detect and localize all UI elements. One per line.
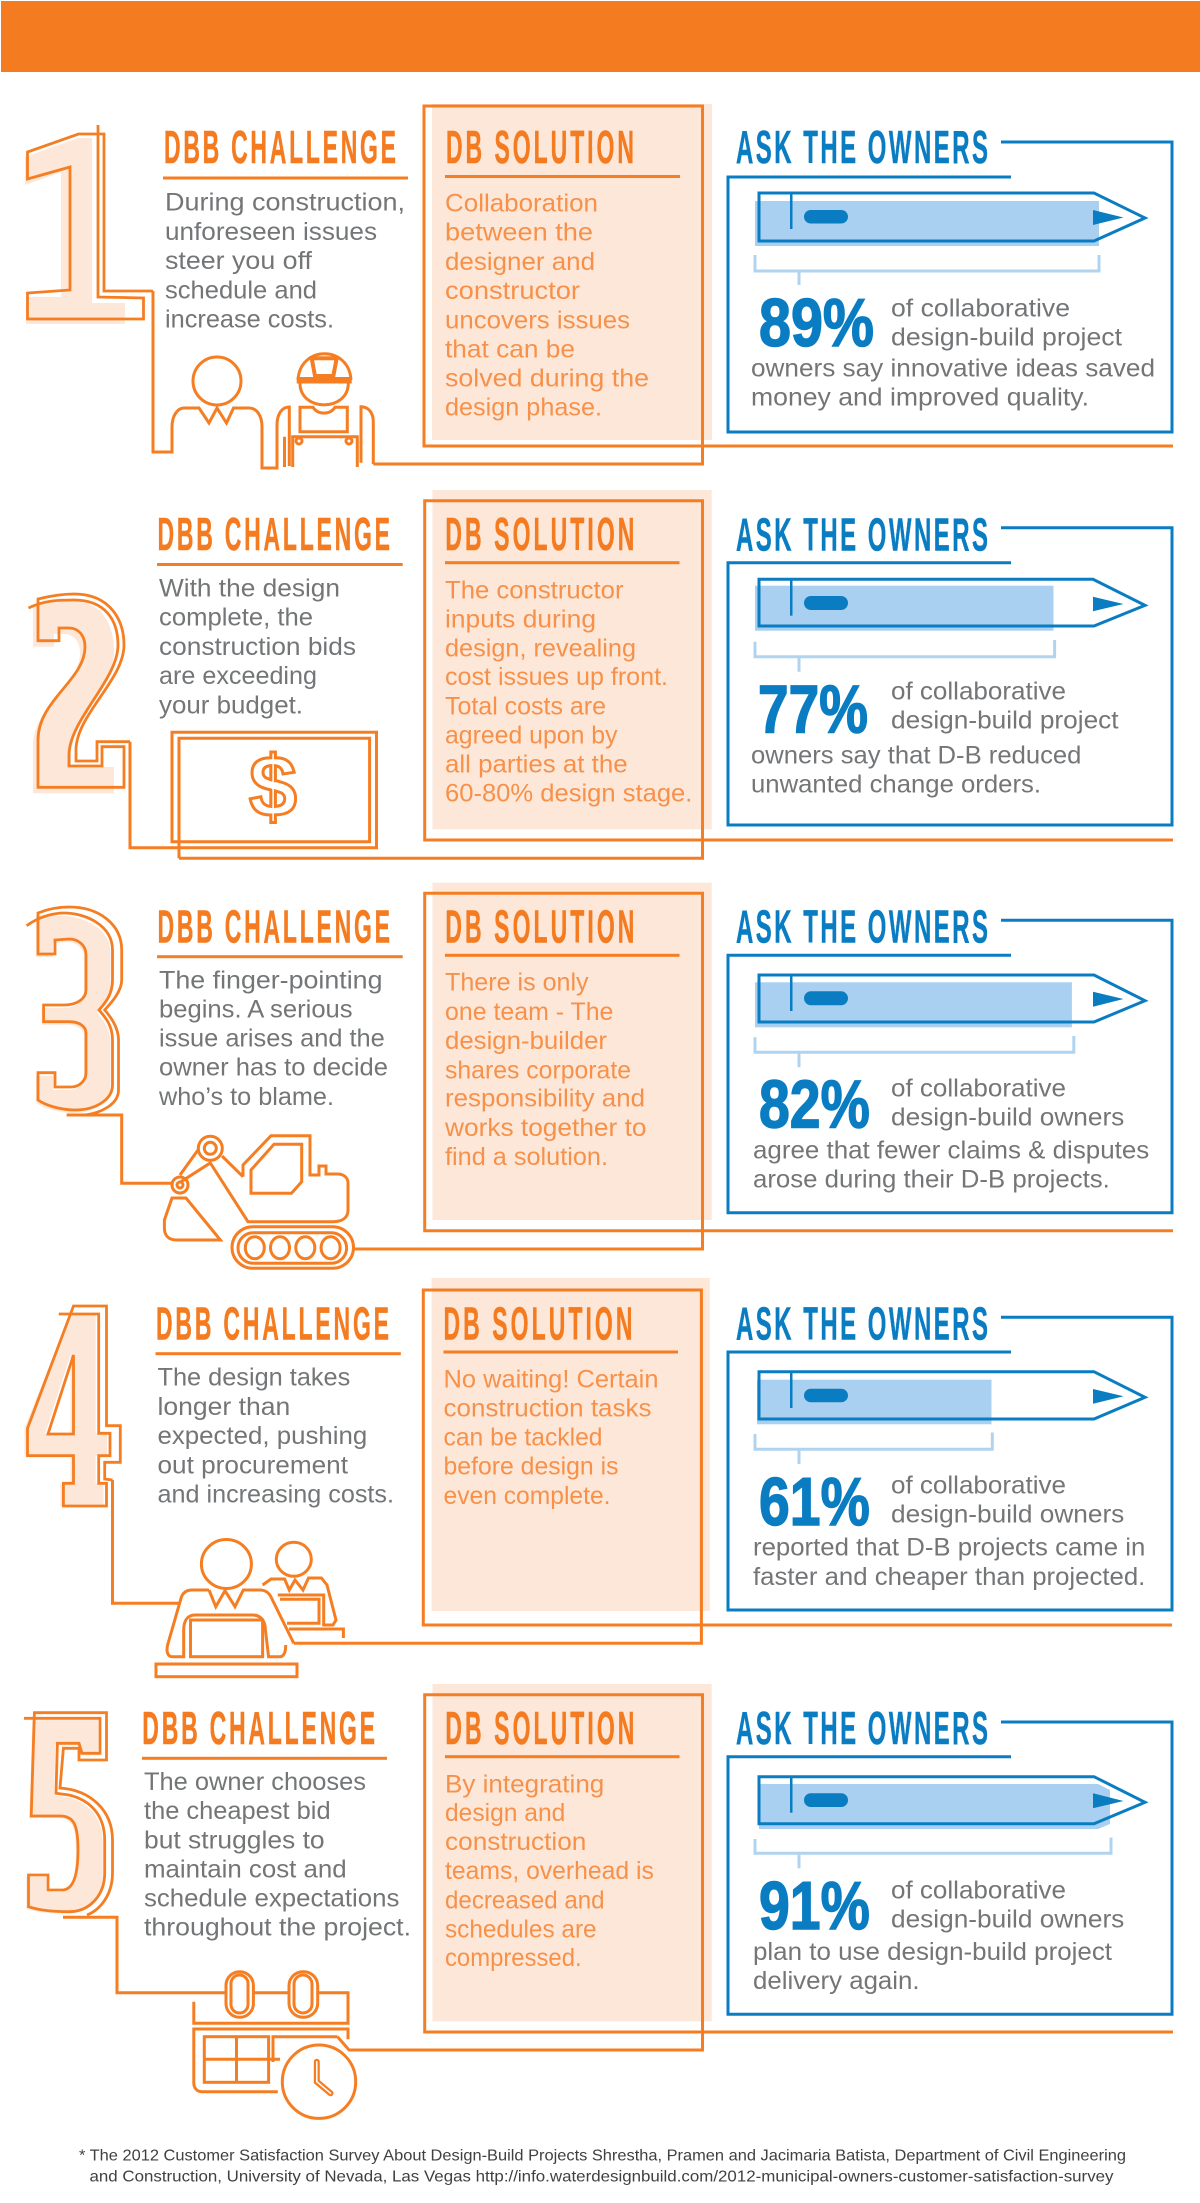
pencil gauge 89% [755, 193, 1145, 285]
DB solution text: agreed upon by [445, 721, 618, 749]
panel: row 2 [28, 490, 1173, 858]
number 4 [24, 1306, 120, 1506]
DB solution text: that can be [445, 335, 575, 363]
DBB challenge heading: DBB CHALLENGE [158, 508, 390, 560]
stat description [753, 1075, 1149, 1193]
DB solution text: The constructor [445, 576, 624, 604]
DBB challenge text: your budget. [159, 691, 303, 719]
panel: ask the owners [728, 1298, 1172, 1610]
DBB challenge text: schedule expectations [144, 1885, 399, 1913]
DB solution text: before design is [444, 1452, 618, 1480]
DB solution text: cost issues up front. [445, 663, 668, 691]
stat description: delivery again. [753, 1967, 920, 1995]
DBB challenge text: During construction, [165, 189, 405, 217]
DBB challenge text: The finger-pointing [159, 966, 382, 994]
header band [1, 1, 1200, 72]
panel: ask the owners [728, 122, 1172, 432]
stat description: of collaborative [891, 1471, 1066, 1499]
footnote: * The 2012 Customer Satisfaction Survey About Design-Build Projects Shrestha, Pramen and Jacimaria Batista, Department of Civil Engineering [79, 2148, 1126, 2165]
panel: DB solution [294, 1278, 1172, 1643]
DB solution heading: DB SOLUTION [444, 1298, 632, 1350]
DB solution text: 60-80% design stage. [445, 780, 692, 808]
stat description: design-build owners [891, 1500, 1124, 1528]
icon: owner and construction worker [153, 291, 373, 468]
DBB challenge text: out procurement [158, 1451, 348, 1479]
stat description: of collaborative [891, 1876, 1066, 1904]
stat description [751, 677, 1119, 798]
DBB challenge text: construction bids [159, 633, 356, 661]
icon: two people at laptops [112, 1480, 343, 1677]
DB solution text: find a solution. [445, 1143, 608, 1171]
panel: row 4 [24, 1278, 1172, 1677]
DBB challenge text: issue arises and the [159, 1025, 385, 1053]
DBB challenge text [144, 1768, 411, 1942]
DBB challenge text: begins. A serious [159, 996, 353, 1024]
stat description [753, 1471, 1145, 1591]
panel: ask the owners [728, 1703, 1172, 2014]
DB solution text [444, 969, 646, 1171]
DBB challenge text: owner has to decide [159, 1054, 388, 1082]
icon: excavator [67, 1115, 353, 1268]
DBB challenge text: expected, pushing [158, 1422, 367, 1450]
DB solution text: design and [445, 1799, 565, 1827]
DBB challenge text: maintain cost and [144, 1855, 347, 1883]
DBB challenge text: but struggles to [144, 1826, 325, 1854]
DBB challenge text [158, 1364, 394, 1508]
DB solution text: all parties at the [445, 751, 628, 779]
DB solution heading: DB SOLUTION [446, 121, 634, 173]
DBB challenge heading: DBB CHALLENGE [158, 901, 390, 953]
DBB challenge text: The owner chooses [144, 1768, 366, 1796]
stat description [751, 295, 1155, 412]
stat 77%: 77% [758, 671, 868, 747]
ask the owners heading: ASK THE OWNERS [736, 509, 988, 561]
panel: row 3 [27, 883, 1173, 1268]
ask the owners heading: ASK THE OWNERS [736, 1703, 988, 1754]
stat description: unwanted change orders. [751, 770, 1041, 798]
stat description: money and improved quality. [751, 384, 1089, 412]
DB solution text: By integrating [445, 1770, 604, 1798]
DBB challenge heading: DBB CHALLENGE [142, 1702, 375, 1754]
panel: ask the owners [728, 901, 1172, 1213]
stat description: design-build project [891, 324, 1122, 352]
panel: DB solution [338, 1684, 1173, 2050]
stat description: design-build owners [891, 1104, 1124, 1132]
DB solution text [445, 576, 692, 808]
DBB challenge text: who’s to blame. [158, 1083, 334, 1111]
number 1 [25, 125, 153, 324]
DB solution text: even complete. [444, 1482, 610, 1510]
DBB challenge heading: DBB CHALLENGE [164, 121, 396, 173]
icon: dollar bill: $ [249, 739, 297, 835]
DBB challenge text: are exceeding [159, 662, 317, 690]
number 5 [24, 1713, 112, 1915]
DB solution text: construction [445, 1828, 586, 1856]
panel: row 1 [25, 104, 1173, 468]
DB solution text: compressed. [445, 1944, 582, 1972]
DBB challenge text: and increasing costs. [158, 1480, 394, 1508]
DBB challenge text: steer you off [165, 247, 312, 275]
DB solution text: design-builder [445, 1027, 607, 1055]
DB solution heading: DB SOLUTION [445, 901, 634, 953]
ask the owners heading: ASK THE OWNERS [736, 1298, 988, 1350]
DB solution text: Total costs are [445, 692, 606, 720]
DB solution text: design, revealing [445, 635, 636, 663]
stat description: agree that fewer claims & disputes [753, 1136, 1149, 1164]
DB solution heading: DB SOLUTION [445, 508, 634, 560]
stat 61%: 61% [759, 1464, 870, 1540]
stat description: arose during their D-B projects. [753, 1165, 1110, 1193]
DB solution text: works together to [444, 1114, 646, 1142]
DB solution text: one team - The [445, 998, 613, 1026]
footnote: and Construction, University of Nevada, Las Vegas http://info.waterdesignbuild.com/2012-municipal-owners-customer-satisfaction-survey [90, 2169, 1114, 2186]
DBB challenge text: longer than [158, 1393, 290, 1421]
DB solution text: designer and [445, 248, 595, 276]
stat description [753, 1876, 1124, 1995]
stat description: design-build owners [891, 1905, 1124, 1933]
panel: row 5 [24, 1684, 1173, 2118]
DB solution text: construction tasks [444, 1395, 652, 1423]
stat 82%: 82% [759, 1067, 870, 1143]
DBB challenge text: increase costs. [165, 305, 334, 333]
icon: calendar and clock [63, 1917, 356, 2118]
DB solution text: uncovers issues [445, 306, 630, 334]
icon: dollar bill [130, 732, 376, 858]
pencil gauge 82% [755, 975, 1145, 1067]
footnote [79, 2148, 1126, 2186]
stat description: of collaborative [891, 1075, 1066, 1103]
number 3 [27, 907, 122, 1115]
DB solution text: responsibility and [445, 1085, 645, 1113]
DB solution text: constructor [445, 277, 580, 305]
DBB challenge heading: DBB CHALLENGE [156, 1298, 389, 1350]
DBB challenge text [158, 966, 388, 1111]
DB solution text [445, 190, 649, 422]
stat description: design-build project [891, 707, 1119, 735]
stat description: plan to use design-build project [753, 1938, 1112, 1966]
DBB challenge text: With the design [159, 575, 340, 603]
panel: DB solution [179, 490, 1173, 858]
DB solution text: between the [445, 219, 593, 247]
DBB challenge text: The design takes [158, 1364, 350, 1392]
DB solution text: decreased and [445, 1886, 605, 1914]
DB solution text [445, 1770, 654, 1972]
ask the owners heading: ASK THE OWNERS [736, 901, 988, 953]
stat 91%: 91% [759, 1868, 870, 1944]
pencil gauge 77% [755, 579, 1145, 672]
stat 89%: 89% [759, 285, 874, 361]
DB solution text: schedules are [445, 1915, 597, 1943]
DBB challenge text [165, 189, 405, 333]
DBB challenge text: complete, the [159, 604, 313, 632]
DB solution text: No waiting! Certain [444, 1365, 658, 1393]
DB solution text: teams, overhead is [445, 1857, 654, 1885]
stat description: of collaborative [891, 677, 1066, 705]
DBB challenge text: throughout the project. [144, 1914, 411, 1942]
panel: ask the owners [728, 509, 1172, 825]
stat description: of collaborative [891, 295, 1070, 323]
stat description: reported that D-B projects came in [753, 1534, 1145, 1562]
DB solution text: can be tackled [444, 1424, 602, 1452]
DB solution text: inputs during [445, 605, 596, 633]
DB solution text: shares corporate [445, 1056, 631, 1084]
DBB challenge text: schedule and [165, 276, 317, 304]
panel: DB solution [354, 883, 1173, 1249]
panel: DB solution [373, 104, 1173, 464]
DB solution text: design phase. [445, 394, 602, 422]
DB solution text: Collaboration [445, 190, 598, 218]
number 2 [28, 594, 130, 793]
ask the owners heading: ASK THE OWNERS [736, 122, 988, 173]
DBB challenge text: the cheapest bid [144, 1797, 331, 1825]
stat description: owners say innovative ideas saved [751, 355, 1155, 383]
pencil gauge 91% [755, 1777, 1145, 1868]
DBB challenge text [159, 575, 356, 719]
stat description: faster and cheaper than projected. [753, 1563, 1145, 1591]
DB solution text: solved during the [445, 365, 649, 393]
pencil gauge 61% [755, 1372, 1145, 1464]
DB solution heading: DB SOLUTION [445, 1702, 634, 1754]
DB solution text [444, 1365, 658, 1510]
DB solution text: There is only [445, 969, 589, 997]
DBB challenge text: unforeseen issues [165, 218, 377, 246]
stat description: owners say that D-B reduced [751, 741, 1081, 769]
